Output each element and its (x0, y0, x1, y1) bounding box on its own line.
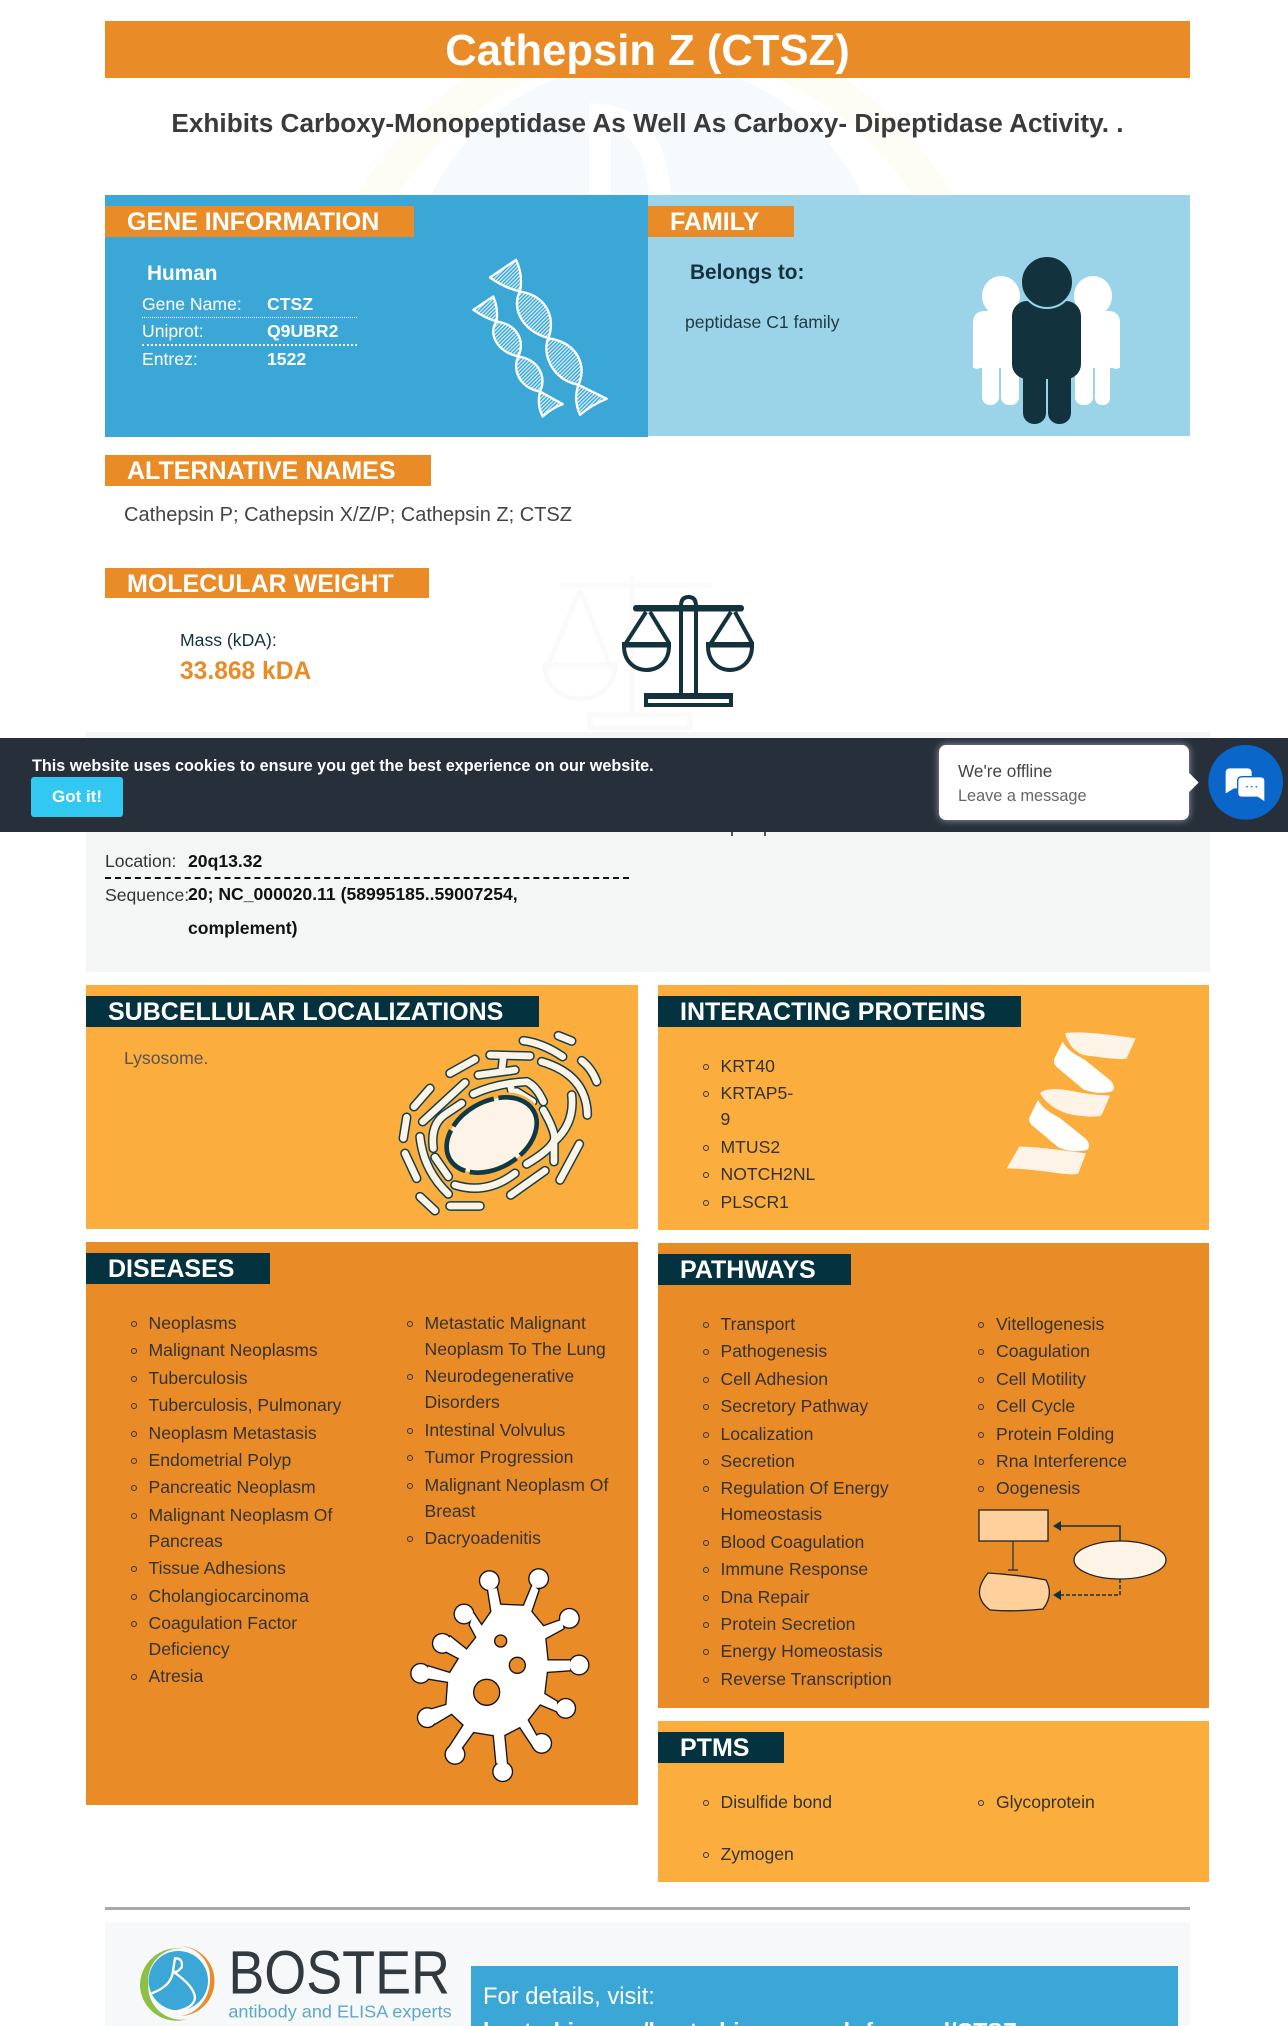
diseases list: column one: Coagulation Factor (148, 1613, 297, 1633)
heading: subcellular localizations: SUBCELLULAR LOCALIZATIONS (108, 998, 503, 1026)
icon: virus (410, 1568, 590, 1782)
entrez row (142, 349, 306, 369)
panel: interacting proteins (658, 985, 1209, 1230)
title banner (105, 21, 1190, 78)
pathways list: column two: Protein Folding (996, 1424, 1114, 1444)
leave a message label: Leave a message (958, 787, 1087, 805)
pathways list: column one: Blood Coagulation (720, 1532, 864, 1552)
diseases list: column one: Malignant Neoplasms (148, 1340, 318, 1360)
pathways list: column one: Cell Adhesion (720, 1369, 828, 1389)
pathways list: column two: Oogenesis (996, 1478, 1080, 1498)
location row: 20q13.32 (188, 851, 262, 871)
pathways list: column one: Dna Repair (720, 1587, 810, 1607)
diseases list: column two: Tumor Progression (424, 1447, 573, 1467)
gene name row: Gene Name: (142, 294, 242, 314)
pathways list: column one: Secretion (720, 1451, 795, 1471)
diseases list: column two: Neurodegenerative (424, 1366, 574, 1386)
pathways list: column one: Transport (720, 1314, 795, 1334)
diseases list: column two: Neoplasm To The Lung (424, 1339, 606, 1359)
pathways list: column one: Reverse Transcription (720, 1669, 892, 1689)
pathways list: column one (703, 1314, 892, 1689)
panel: gene location (86, 732, 1210, 972)
gene name row: CTSZ (267, 294, 313, 314)
pathways list: column one: Regulation Of Energy (720, 1478, 889, 1498)
pathways list: column one: Pathogenesis (720, 1341, 827, 1361)
sequence row: complement) (188, 918, 298, 938)
diseases list: column one: Malignant Neoplasm Of (148, 1505, 332, 1525)
subtitle: Exhibits Carboxy-Monopeptidase As Well As Carboxy- Dipeptidase Activity. . (171, 108, 1124, 138)
diseases list: column one: Endometrial Polyp (148, 1450, 291, 1470)
diseases list: column one: Neoplasms (148, 1313, 237, 1333)
protein list: KRTAP5- (720, 1083, 793, 1103)
uniprot row: Uniprot: (142, 321, 204, 341)
protein list: KRT40 (720, 1056, 775, 1076)
icon: dna helices (472, 258, 608, 418)
location row (105, 848, 629, 879)
panel: family (648, 195, 1190, 436)
panel: subcellular localizations (86, 985, 638, 1229)
uniprot row: Q9UBR2 (267, 321, 338, 341)
ptms list: column two: Glycoprotein (996, 1792, 1095, 1812)
details label: For details, visit: (483, 1983, 655, 2010)
ptms list: column one: Zymogen (720, 1844, 794, 1864)
diseases list: column two: Breast (424, 1501, 475, 1521)
diseases list: column one (131, 1313, 342, 1686)
got it button (31, 777, 123, 817)
heading: alternative names: ALTERNATIVE NAMES (127, 457, 396, 485)
ptms list: column one (703, 1792, 832, 1864)
diseases list: column one: Atresia (148, 1666, 203, 1686)
diseases list: column one: Tissue Adhesions (148, 1558, 286, 1578)
panel: gene information (105, 195, 648, 437)
diseases list: column two: Intestinal Volvulus (424, 1420, 565, 1440)
heading: pathways: PATHWAYS (680, 1256, 816, 1284)
diseases list: column one: Pancreatic Neoplasm (148, 1477, 316, 1497)
pathways list: column two: Cell Cycle (996, 1396, 1075, 1416)
protein list: 9 (720, 1109, 730, 1129)
diseases list: column one: Pancreas (148, 1531, 223, 1551)
pathways list: column two: Vitellogenesis (996, 1314, 1104, 1334)
logo: boster (140, 1938, 452, 2021)
watermark logo (358, 78, 952, 195)
heading: ptms: PTMS (680, 1734, 749, 1762)
heading: ptms (658, 1732, 784, 1763)
heading: gene information: GENE INFORMATION (127, 208, 379, 236)
entrez row: Entrez: (142, 349, 198, 369)
pathways list: column two: Coagulation (996, 1341, 1090, 1361)
diseases list: column one: Tuberculosis (148, 1368, 248, 1388)
diseases list: column two: Dacryoadenitis (424, 1528, 541, 1548)
diseases list: column two: Malignant Neoplasm Of (424, 1475, 608, 1495)
icon: balance scale (622, 595, 754, 707)
pathways list: column two: Cell Motility (996, 1369, 1086, 1389)
sequence row: Sequence: (105, 885, 189, 905)
got it button: Got it! (52, 787, 102, 806)
heading: pathways (658, 1254, 851, 1285)
heading: family (648, 206, 794, 237)
belongs to label: Belongs to: (690, 261, 804, 284)
diseases list: column two: Disorders (424, 1392, 500, 1412)
chat button (1208, 745, 1283, 820)
sequence row: 20; NC_000020.11 (58995185..59007254, (188, 884, 518, 904)
protein list (703, 1056, 815, 1212)
cookie message: This website uses cookies to ensure you get the best experience on our website. (32, 757, 654, 775)
protein list: MTUS2 (720, 1137, 780, 1157)
uniprot row (142, 318, 357, 346)
pathways list: column one: Protein Secretion (720, 1614, 855, 1634)
heading: molecular weight: MOLECULAR WEIGHT (127, 570, 394, 598)
logo: boster: BOSTER (228, 1938, 450, 2007)
heading: interacting proteins: INTERACTING PROTEINS (680, 998, 986, 1026)
panel: ptms (658, 1721, 1209, 1882)
protein list: NOTCH2NL (720, 1164, 815, 1184)
heading: diseases (86, 1253, 270, 1284)
diseases list: column one: Cholangiocarcinoma (148, 1586, 309, 1606)
location row: Location: (105, 851, 176, 871)
icon: cell organelle (398, 1030, 602, 1216)
pathways list: column two: Rna Interference (996, 1451, 1127, 1471)
family name: peptidase C1 family (685, 312, 840, 332)
diseases list: column one: Neoplasm Metastasis (148, 1423, 317, 1443)
diseases list: column one: Deficiency (148, 1639, 230, 1659)
details box (471, 1966, 1178, 2026)
species label: Human (147, 262, 217, 285)
panel: diseases (86, 1242, 638, 1805)
protein list: PLSCR1 (720, 1192, 789, 1212)
chat tooltip (939, 745, 1189, 820)
pathways list: column one: Localization (720, 1424, 813, 1444)
pathways list: column one: Secretory Pathway (720, 1396, 868, 1416)
gene name row (142, 291, 357, 318)
localization text: Lysosome. (124, 1048, 208, 1068)
logo: boster: antibody and ELISA experts (228, 2001, 452, 2021)
diseases list: column two: Metastatic Malignant (424, 1313, 586, 1333)
footer panel (105, 1922, 1190, 2026)
watermark scale (0, 560, 800, 740)
cookie bar (0, 738, 1288, 832)
panel: pathways (658, 1243, 1209, 1708)
pathways list: column one: Energy Homeostasis (720, 1641, 883, 1661)
icon: pathway diagram (978, 1509, 1167, 1612)
entrez row: 1522 (267, 349, 306, 369)
diseases list: column one: Tuberculosis, Pulmonary (148, 1395, 341, 1415)
ptms list: column one: Disulfide bond (720, 1792, 832, 1812)
sequence row (105, 884, 518, 938)
title banner: Cathepsin Z (CTSZ) (445, 27, 850, 75)
mass label: Mass (kDA): (180, 630, 277, 650)
icon: people (973, 257, 1120, 424)
icon: protein ribbon (1006, 1032, 1136, 1174)
mass value: 33.868 kDA (180, 658, 311, 685)
pathways list: column two (978, 1314, 1127, 1498)
heading: diseases: DISEASES (108, 1255, 234, 1283)
alternative names text: Cathepsin P; Cathepsin X/Z/P; Cathepsin Z; CTSZ (124, 504, 572, 526)
heading: family: FAMILY (670, 208, 759, 236)
pathways list: column one: Immune Response (720, 1559, 868, 1579)
offline label: We're offline (958, 761, 1052, 781)
diseases list: column two (407, 1313, 608, 1548)
pathways list: column one: Homeostasis (720, 1504, 822, 1524)
